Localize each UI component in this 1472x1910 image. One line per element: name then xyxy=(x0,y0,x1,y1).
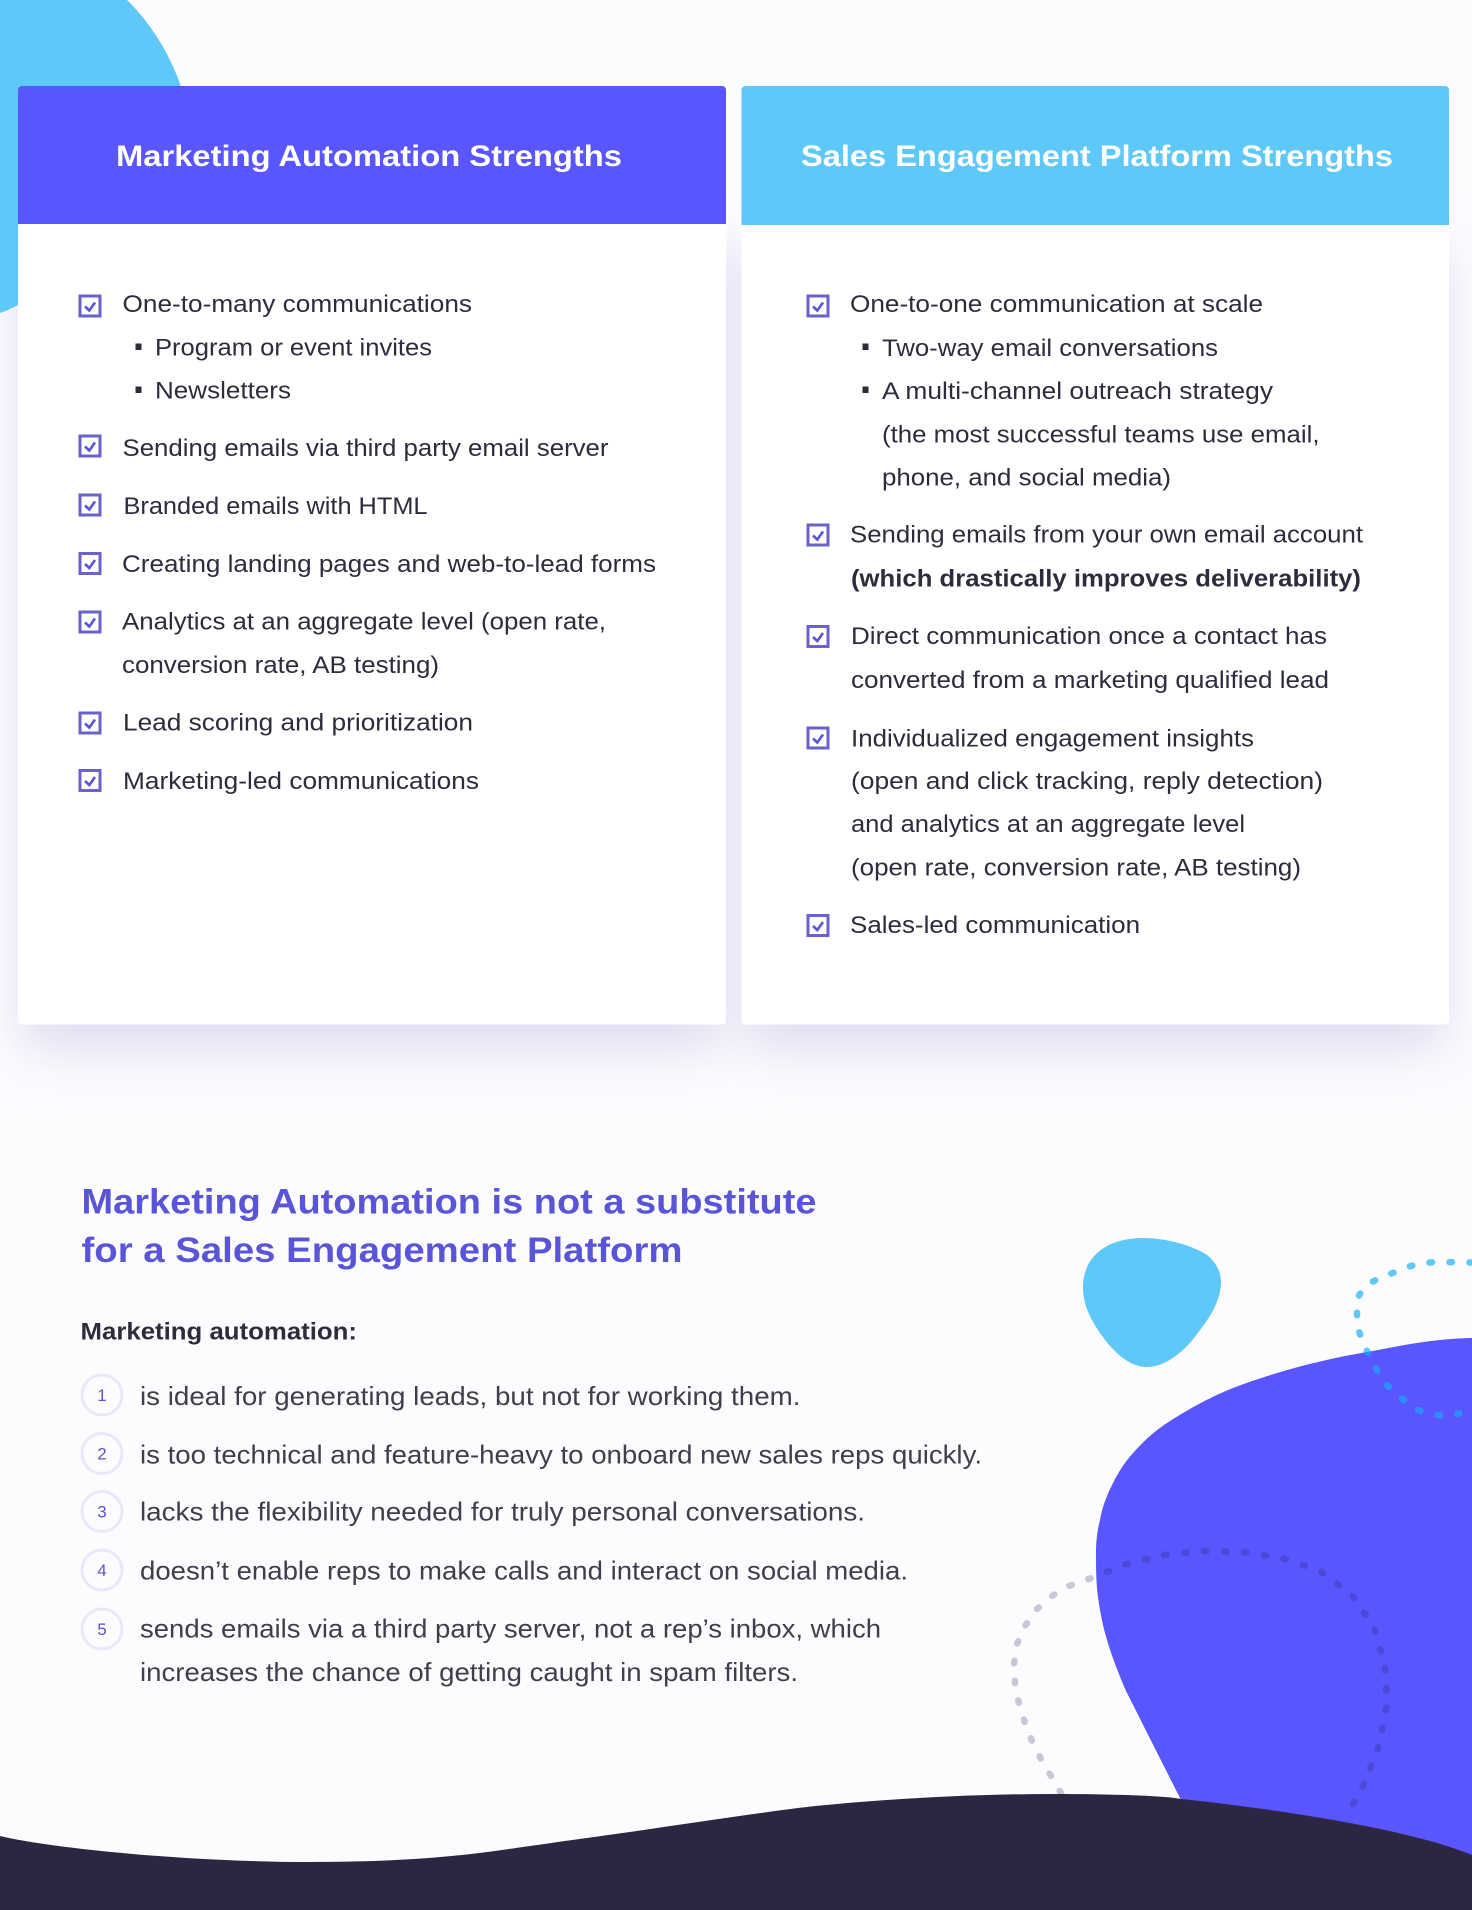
sub bullet: newsletters: Newsletters xyxy=(155,378,291,404)
checklist: marketing automation xyxy=(80,291,656,795)
sub bullet: multi-channel: (the most successful teams use email, xyxy=(882,422,1320,448)
checklist: sales engagement xyxy=(808,291,1363,939)
check item: analytics: Analytics at an aggregate level (open rate, xyxy=(122,608,606,636)
dotted overlay on indigo blob xyxy=(1104,1351,1463,1808)
check item: landing pages: Creating landing pages and web-to-lead forms xyxy=(122,551,656,578)
check item: individualized insights: (open and click tracking, reply detection) xyxy=(851,768,1323,795)
check item: marketing-led: Marketing-led communications xyxy=(123,768,479,795)
list item 2: 2 xyxy=(97,1444,107,1464)
check item: direct communication xyxy=(808,623,1329,694)
check item: lead scoring: Lead scoring and prioritization xyxy=(123,710,473,736)
dotted outline: grey xyxy=(1014,1551,1387,1817)
list item 1: is ideal for generating leads, but not for working them. xyxy=(140,1381,800,1411)
panel: marketing automation strengths xyxy=(18,86,726,1024)
panel: sales engagement platform strengths xyxy=(742,86,1449,1024)
check item: branded emails: Branded emails with HTML xyxy=(124,493,428,520)
check item: individualized insights xyxy=(808,726,1323,882)
check item: analytics xyxy=(80,608,606,679)
list item 1 xyxy=(82,1375,800,1415)
decorative blob: small cyan xyxy=(1083,1238,1221,1367)
list item 5 xyxy=(82,1609,881,1687)
sub bullet: program invites: Program or event invites xyxy=(155,334,432,362)
sub bullet: multi-channel xyxy=(862,378,1320,492)
panel header: marketing automation: Marketing Automation Strengths xyxy=(116,140,622,173)
list item 5: increases the chance of getting caught in spam filters. xyxy=(140,1657,798,1687)
list item 1: 1 xyxy=(97,1386,107,1405)
sub bullet: multi-channel: A multi-channel outreach strategy xyxy=(882,378,1273,405)
check item: one-to-many: One-to-many communications xyxy=(122,291,472,318)
check item: individualized insights: and analytics at an aggregate level xyxy=(851,811,1245,838)
heading: not a substitute xyxy=(82,1182,817,1270)
dotted outline: cyan xyxy=(1357,1262,1472,1416)
dark wave footer xyxy=(0,1794,1472,1910)
check item: individualized insights: Individualized engagement insights xyxy=(851,726,1254,752)
list item 4: 4 xyxy=(97,1561,107,1580)
decorative blob: top-left cyan xyxy=(0,0,182,313)
numbered list xyxy=(82,1375,982,1687)
list item 4: doesn’t enable reps to make calls and interact on social media. xyxy=(140,1556,908,1586)
decorative blob: large indigo xyxy=(1096,1338,1472,1880)
panel header: sales engagement: Sales Engagement Platform Strengths xyxy=(801,140,1393,173)
sub bullet: two-way: Two-way email conversations xyxy=(882,335,1218,362)
panel header: marketing automation xyxy=(18,86,726,224)
check item: direct communication: Direct communication once a contact has xyxy=(851,623,1327,650)
list item 3: lacks the flexibility needed for truly personal conversations. xyxy=(140,1496,865,1526)
list item 2: is too technical and feature-heavy to onboard new sales reps quickly. xyxy=(140,1440,982,1470)
check item: one-to-one: One-to-one communication at scale xyxy=(850,291,1263,318)
list item 2 xyxy=(82,1434,982,1474)
heading: not a substitute: for a Sales Engagement Platform xyxy=(82,1231,682,1270)
check item: direct communication: converted from a marketing qualified lead xyxy=(851,667,1329,694)
check item: individualized insights: (open rate, conversion rate, AB testing) xyxy=(851,854,1301,882)
check item: analytics: conversion rate, AB testing) xyxy=(122,652,439,679)
check item: sales-led: Sales-led communication xyxy=(850,912,1140,939)
heading: not a substitute: Marketing Automation is not a substitute xyxy=(82,1182,817,1222)
list item 4 xyxy=(82,1550,908,1590)
panel header: sales engagement xyxy=(742,86,1449,225)
check item: third party server: Sending emails via third party email server xyxy=(122,435,608,462)
check item: own email account: Sending emails from your own email account xyxy=(850,522,1363,548)
sub bullet: multi-channel: phone, and social media) xyxy=(882,464,1171,492)
subheading: marketing automation: Marketing automation: xyxy=(80,1318,357,1346)
list item 3 xyxy=(82,1492,865,1532)
list item 5: 5 xyxy=(97,1620,107,1639)
check item: own email account: (which drastically improves deliverability) xyxy=(851,566,1361,592)
check item: own email account xyxy=(808,522,1363,592)
list item 3: 3 xyxy=(97,1502,107,1522)
list item 5: sends emails via a third party server, not a rep’s inbox, which xyxy=(140,1614,881,1644)
